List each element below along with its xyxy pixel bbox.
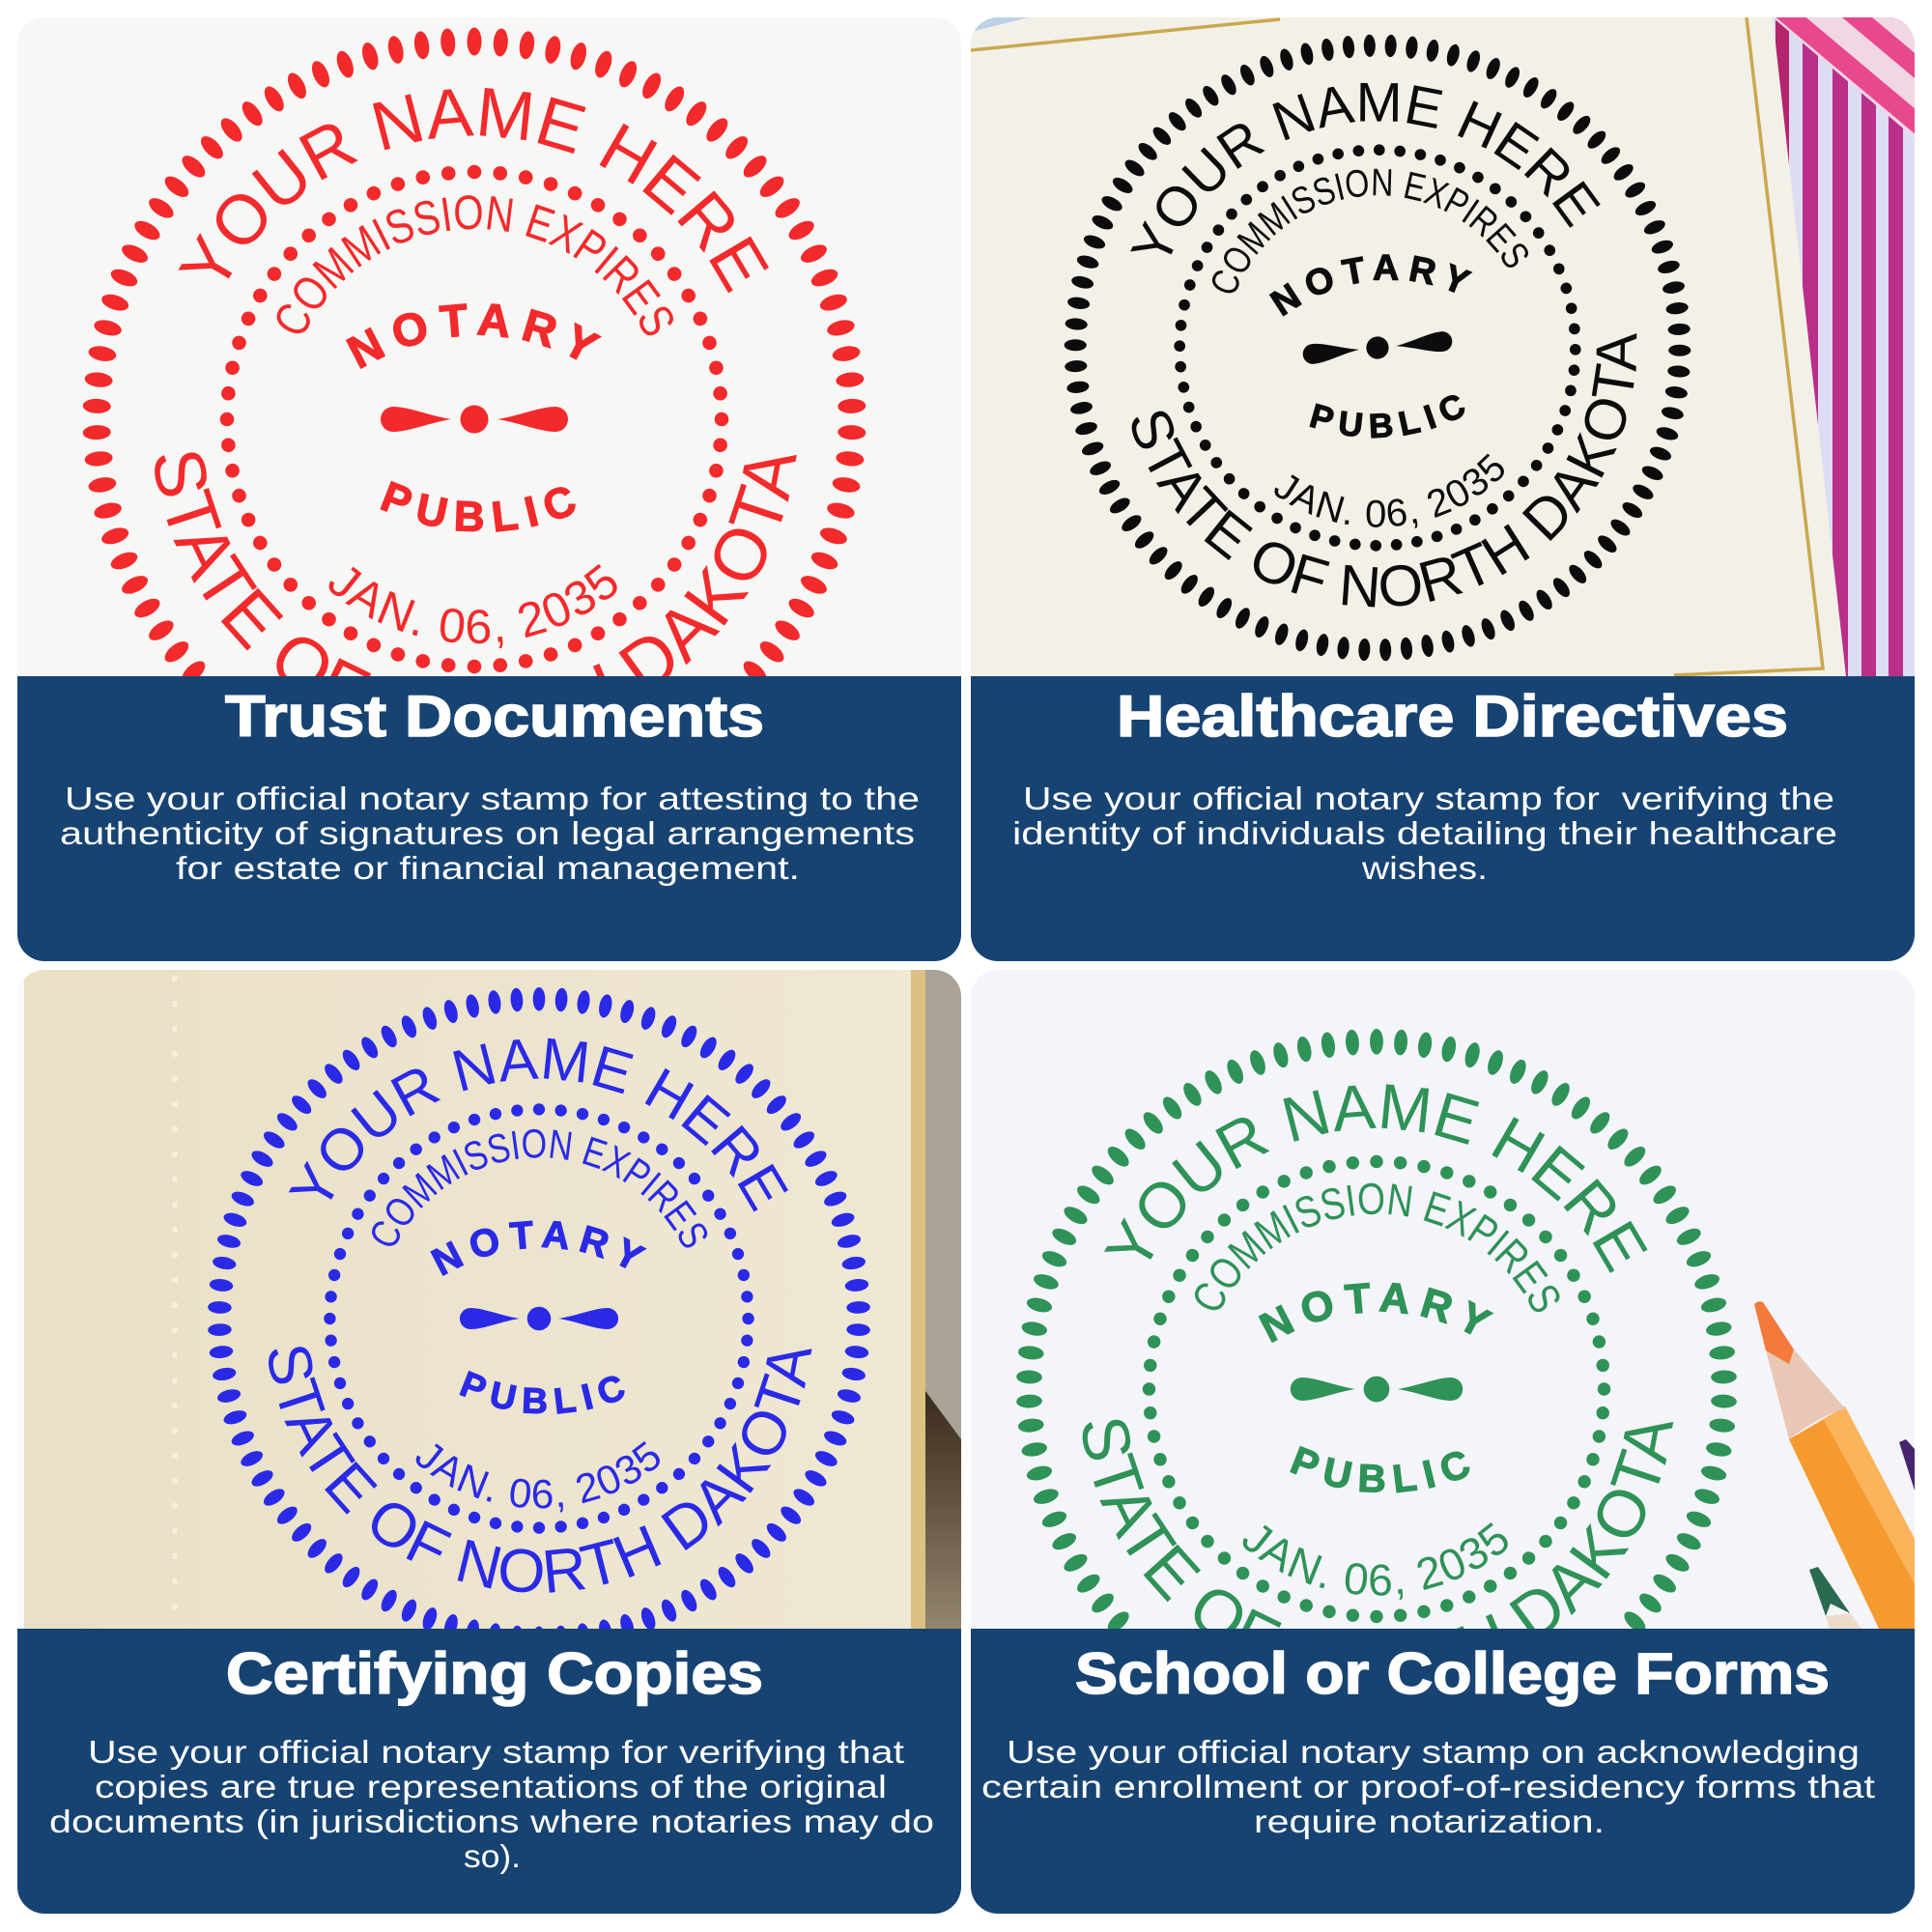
blue notary stamp: COMMISSION EXPIRES [372, 1128, 707, 1248]
gold book edge [911, 970, 925, 1636]
green notary stamp: JAN. 06, 2035 [1242, 1522, 1508, 1600]
gold border [971, 17, 1823, 675]
text block: healthcare directives: Use your official notary stamp for verifying the [1023, 781, 1834, 816]
panel: healthcare directives [971, 17, 1915, 961]
text block: healthcare directives: identity of individuals detailing their healthcare [1012, 815, 1837, 851]
text block: trust documents: for estate or financial management. [176, 850, 800, 886]
caption band [971, 1629, 1915, 1914]
text block: trust documents [60, 781, 920, 886]
green notary stamp: PUBLIC [1290, 1445, 1470, 1493]
heading: healthcare directives: Healthcare Directives [1117, 684, 1788, 749]
text block: school or college forms: certain enrollment or proof-of-residency forms that [981, 1769, 1875, 1804]
black notary stamp: JAN. 06, 2035 [1274, 454, 1504, 528]
book page background [17, 970, 961, 1636]
text block: certifying copies: Use your official notary stamp for verifying that [88, 1734, 904, 1770]
red notary stamp: JAN. 06, 2035 [328, 564, 617, 648]
caption band [971, 676, 1915, 961]
blue notary stamp [208, 987, 870, 1629]
black notary stamp: COMMISSION EXPIRES [1211, 168, 1528, 294]
red notary stamp: PUBLIC [380, 481, 576, 532]
background [971, 17, 1915, 684]
text block: certifying copies [49, 1734, 934, 1874]
green notary stamp [1016, 1029, 1737, 1629]
blue notary stamp: JAN. 06, 2035 [415, 1441, 660, 1513]
dark spine shadow [925, 1391, 961, 1633]
caption band [17, 676, 961, 961]
ribbon stripes [1773, 17, 1918, 684]
heading: certifying copies: Certifying Copies [226, 1641, 763, 1706]
red notary stamp: COMMISSION EXPIRES [276, 195, 673, 336]
stitch line [172, 976, 178, 1633]
black notary stamp: NOTARY [1269, 254, 1472, 317]
text block: certifying copies: documents (in jurisdictions where notaries may do [49, 1804, 934, 1839]
blue notary stamp: YOUR NAME HERE [288, 1037, 788, 1211]
red notary stamp: NOTARY [346, 303, 602, 369]
card paper sheet [1773, 19, 1846, 676]
text block: certifying copies: so). [464, 1838, 521, 1874]
text block: school or college forms: require notarization. [1254, 1804, 1605, 1839]
green notary stamp: STATE OF NORTH DAKOTA [1082, 1420, 1673, 1629]
black notary stamp: YOUR NAME HERE [1130, 83, 1601, 255]
blue notary stamp: STATE OF NORTH DAKOTA [269, 1347, 811, 1593]
black notary stamp: STATE OF NORTH DAKOTA [1132, 333, 1636, 607]
white margin sliver [17, 970, 24, 1636]
caption band [17, 1629, 961, 1914]
heading: trust documents: Trust Documents [225, 684, 764, 749]
blue notary stamp: PUBLIC [460, 1370, 625, 1414]
icon: orange pencil [1754, 1301, 1915, 1633]
black notary stamp: PUBLIC [1310, 395, 1464, 439]
green notary stamp: NOTARY [1258, 1283, 1493, 1343]
panel: school or college forms [971, 970, 1915, 1914]
green notary stamp: COMMISSION EXPIRES [1194, 1182, 1559, 1312]
text block: certifying copies: copies are true representations of the original [95, 1769, 887, 1804]
red notary stamp: YOUR NAME HERE [178, 88, 769, 294]
red notary stamp: STATE OF NORTH DAKOTA [155, 452, 797, 676]
blue notary stamp: NOTARY [430, 1221, 647, 1276]
heading: school or college forms: School or College Forms [1075, 1641, 1830, 1706]
green notary stamp: YOUR NAME HERE [1104, 1084, 1648, 1273]
text block: school or college forms: Use your official notary stamp on acknowledging [1007, 1734, 1860, 1770]
panel: certifying copies [17, 970, 961, 1914]
text block: trust documents: authenticity of signatures on legal arrangements [60, 815, 915, 851]
blue table corner [975, 17, 1028, 31]
icon: purple pencil [1899, 1439, 1915, 1491]
paper background [971, 970, 1915, 1636]
paper background [17, 17, 961, 684]
text block: school or college forms [981, 1734, 1875, 1839]
text block: healthcare directives [1012, 781, 1837, 886]
red notary stamp [83, 27, 866, 676]
icon: green pencil [1809, 1567, 1861, 1629]
text block: trust documents: Use your official notary stamp for attesting to the [65, 781, 920, 816]
text block: healthcare directives: wishes. [1361, 850, 1488, 886]
panel: trust documents [17, 17, 961, 961]
cloth spine [925, 970, 961, 1453]
black notary stamp [1065, 35, 1690, 661]
